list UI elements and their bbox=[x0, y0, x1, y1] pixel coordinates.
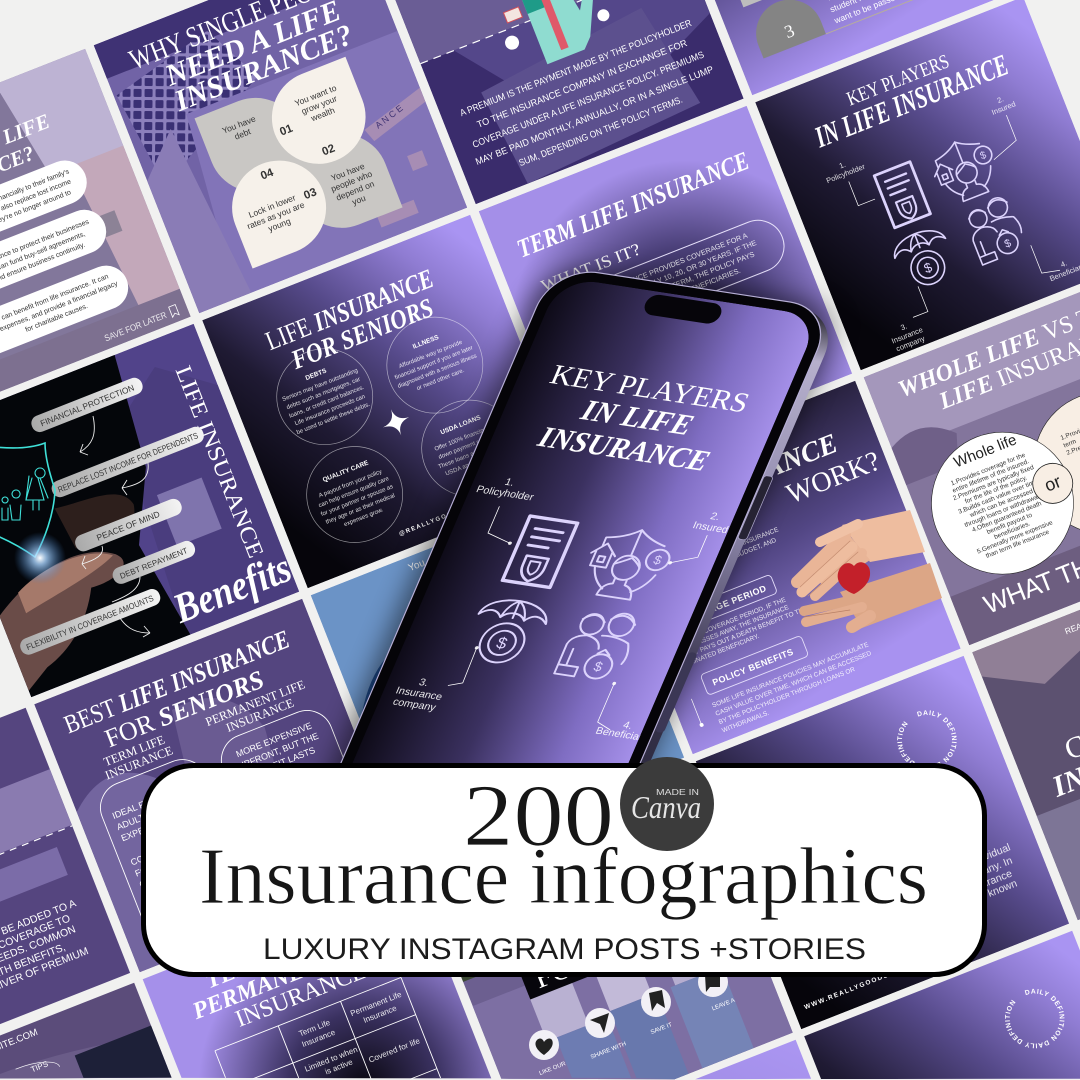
intro text bbox=[707, 526, 784, 569]
title: BEST LIFE INSURANCE bbox=[60, 624, 294, 739]
screen title: IN LIFE bbox=[575, 393, 699, 442]
outlined pill: SPECIFIC PERIOD, USUALLY 10, 20, OR 30 YEARS. IF THE bbox=[567, 238, 758, 320]
petal diagram: debt bbox=[233, 126, 253, 142]
circle: quality care: for your partner or spouse as bbox=[320, 484, 394, 518]
handle: @REALLYGOODSITE bbox=[398, 502, 477, 538]
phone screen bbox=[309, 277, 829, 906]
title bbox=[264, 269, 433, 370]
title bbox=[179, 901, 404, 1047]
circle: whole life: 5.Generally more expensive bbox=[976, 519, 1054, 556]
circle: debts: DEBTS bbox=[305, 367, 328, 382]
icon: beneficiaries bbox=[554, 607, 644, 683]
definition text: insurance bbox=[967, 868, 1014, 895]
main heading: Insurance infographics bbox=[199, 833, 928, 921]
definition text: MAY BE PAID MONTHLY, ANNUALLY, OR IN A SINGLE LUMP bbox=[474, 64, 715, 168]
made in canva badge bbox=[620, 757, 714, 851]
panel: riders card bbox=[0, 708, 130, 1078]
step number arch bbox=[756, 0, 826, 58]
benefit pill three bbox=[0, 266, 128, 354]
circle: illness: diagnosed with a serious illness bbox=[397, 353, 478, 390]
definition text bbox=[953, 841, 1025, 908]
circle: whole life: than term life insurance bbox=[985, 528, 1051, 560]
circular daily definition badge: DAILY DEFINITION DAILY DEFINITION bbox=[1005, 988, 1064, 1048]
intro text: NEEDS, BUDGET, AND bbox=[710, 537, 778, 569]
panel: key players in life insurance bbox=[755, 0, 1080, 370]
number 200: 200 bbox=[463, 768, 614, 865]
benefits text: BY THE POLICYHOLDER THROUGH LOANS OR bbox=[718, 666, 856, 726]
circle: quality care: A payout from your policy bbox=[318, 469, 383, 499]
label: policyholder bbox=[822, 153, 878, 213]
option: term life: FOR A SET bbox=[134, 852, 181, 879]
panel: definition card bbox=[696, 656, 1069, 1030]
panel: what is life insurance photo card bbox=[0, 49, 191, 422]
option: term life: TERM LIFE bbox=[102, 732, 167, 769]
panel: definition card bottom bbox=[804, 930, 1080, 1079]
title bbox=[803, 31, 1013, 154]
option: term life: COVERAGE bbox=[129, 839, 180, 867]
panel: permanent life table bbox=[143, 874, 491, 1080]
petal diagram: 02 bbox=[320, 143, 337, 158]
petal diagram: You have bbox=[330, 161, 366, 183]
label: insurance company: company bbox=[895, 334, 926, 353]
circle: usda loans: These loans are backed by bbox=[438, 439, 507, 471]
circle: quality care: QUALITY CARE bbox=[322, 459, 370, 484]
label: policyholder: 1. bbox=[503, 476, 516, 489]
circle: whole life: Whole life bbox=[952, 431, 1019, 471]
coverage text bbox=[641, 590, 812, 682]
circle: usda loans: USDA LOANS bbox=[440, 414, 482, 436]
made in canva badge: Canva bbox=[631, 789, 701, 825]
circle: illness: Affordable way to provide bbox=[398, 339, 464, 370]
icon: policy document bbox=[874, 162, 930, 228]
petal diagram: 03 bbox=[302, 186, 319, 202]
title: HOW DOES INSURANCE bbox=[535, 428, 842, 573]
phone mockup bbox=[294, 266, 845, 917]
heading vertical: LIFE INSURANCE bbox=[171, 362, 269, 561]
title: TERM LIFE VS bbox=[202, 909, 365, 994]
label: policyholder: Policyholder bbox=[825, 162, 867, 185]
panel: blue card behind phone bbox=[311, 490, 684, 863]
label: insured: 2. bbox=[996, 94, 1005, 105]
circle: debts: debts such as mortgages, car bbox=[286, 377, 361, 411]
label: insured: Insured bbox=[691, 520, 730, 536]
circle: whole life: 4.Often guaranteed death bbox=[971, 500, 1043, 534]
title: KEY PLAYERS bbox=[844, 50, 952, 110]
comparison table: Term Life bbox=[298, 1018, 332, 1038]
petal diagram: rates as you are bbox=[246, 199, 306, 231]
made in canva badge: MADE IN bbox=[656, 788, 699, 797]
or badge bbox=[1027, 457, 1079, 509]
coverage text: DURING THE COVERAGE PERIOD, IF THE bbox=[664, 596, 788, 651]
circle: term life bbox=[1013, 371, 1080, 555]
comparison table: is active bbox=[324, 1057, 355, 1076]
dashed line bbox=[420, 0, 582, 64]
circle: whole life: entire lifetime of the insured. bbox=[952, 458, 1030, 495]
circle: illness: ILLNESS bbox=[412, 334, 441, 351]
panel: why single people need life insurance bbox=[94, 0, 467, 313]
comparison table: Insurance bbox=[301, 1028, 337, 1049]
title bbox=[1036, 679, 1080, 804]
benefit pill three: for charitable causes. bbox=[24, 303, 89, 334]
circle: usda loans: down payment required. bbox=[438, 432, 500, 461]
label: insurance company: Insurance bbox=[890, 325, 924, 345]
definition text: SUM, DEPENDING ON THE POLICY TERMS. bbox=[517, 95, 684, 169]
circle: quality care bbox=[306, 446, 403, 543]
panel: whole life vs term life bbox=[864, 272, 1080, 645]
action: save bbox=[641, 987, 674, 1036]
icon: neon family shield bbox=[0, 443, 55, 557]
title banner bbox=[144, 766, 984, 974]
outlined pill: TERM LIFE INSURANCE PROVIDES COVERAGE FOR A bbox=[569, 231, 749, 309]
circle: illness bbox=[386, 316, 484, 414]
icon: teal character bbox=[502, 0, 610, 64]
riders text bbox=[0, 897, 96, 1023]
label: policyholder bbox=[456, 473, 541, 546]
coverage text: COMPANY PAYS OUT A DEATH BENEFIT TO THE bbox=[667, 605, 809, 666]
icon: policy document bbox=[503, 516, 578, 588]
action: like bbox=[529, 1030, 567, 1077]
circle: usda loans bbox=[421, 400, 494, 494]
panel: best life insurance for seniors bbox=[34, 599, 408, 972]
circular daily definition badge: DAILY DEFINITION DAILY DEFINITION bbox=[897, 710, 957, 764]
action: share: SHARE WITH bbox=[590, 1041, 627, 1061]
circle: debts bbox=[276, 348, 374, 445]
circle: whole life: which can be accessed bbox=[968, 488, 1034, 519]
circle: quality care: they age or as their medical bbox=[325, 493, 396, 526]
outlined pill: INSURED DIES DURING THE TERM, THE POLICY PAYS bbox=[576, 250, 756, 327]
title bbox=[127, 0, 349, 112]
box: policy benefits: POLICY BENEFITS bbox=[711, 647, 795, 688]
option: permanent life: MORE EXPENSIVE bbox=[235, 720, 313, 759]
tips oval bbox=[16, 1054, 60, 1080]
action: save: SAVE IT bbox=[650, 1022, 674, 1036]
label: insurance company: 3. bbox=[417, 677, 430, 689]
circle: illness: financial support if you are later bbox=[394, 345, 474, 381]
benefits text: WITHDRAWALS. bbox=[721, 710, 770, 735]
benefits text bbox=[711, 641, 880, 735]
icon: insured person bbox=[926, 131, 1004, 208]
panel: term life insurance bbox=[478, 106, 852, 390]
intro text: YOUR INSURANCE bbox=[722, 526, 780, 555]
step text bbox=[829, 0, 894, 24]
title: PERMANENT LIFE bbox=[188, 923, 395, 1025]
label: beneficiary bbox=[1031, 230, 1080, 285]
dynamic island bbox=[641, 293, 725, 325]
label: beneficiary: 4. bbox=[1059, 259, 1068, 269]
action: share bbox=[585, 1008, 627, 1061]
label: insurance company: 3. bbox=[899, 322, 908, 332]
or badge: or bbox=[1042, 471, 1064, 496]
panel: benefits bbox=[0, 324, 299, 697]
circle: whole life: beneficiaries. bbox=[993, 520, 1032, 541]
circle: debts: Life insurance proceeds can bbox=[294, 394, 366, 427]
phone side band bbox=[303, 271, 842, 917]
petal diagram: depend on bbox=[335, 178, 376, 203]
heading script: Benefits bbox=[167, 545, 298, 633]
option: permanent life: BENEFIT LASTS bbox=[249, 745, 317, 779]
connector dot bbox=[689, 698, 704, 728]
label: policyholder: 1. bbox=[838, 160, 847, 171]
label: beneficiary: 4. bbox=[621, 720, 634, 732]
panel: lavender card bottom bbox=[695, 1040, 811, 1080]
petal diagram: 01 bbox=[278, 122, 295, 139]
subheading: WHAT IS IT? bbox=[538, 240, 643, 296]
petal diagram: wealth bbox=[309, 105, 336, 124]
icon: umbrella coin bbox=[889, 224, 959, 293]
definition text: an individual bbox=[953, 841, 1012, 874]
petal diagram: You want to bbox=[293, 83, 338, 108]
hands holding a heart bbox=[797, 510, 942, 628]
screen title: INSURANCE bbox=[532, 420, 715, 477]
icon: insured person bbox=[575, 524, 680, 603]
label: beneficiary: Beneficiary bbox=[594, 725, 651, 744]
circle: term life: term bbox=[1063, 438, 1077, 449]
black banner: FOLLOW US bbox=[529, 902, 700, 995]
option: term life: INSURANCE bbox=[103, 743, 175, 783]
title: TERM LIFE INSURANCE bbox=[513, 146, 753, 263]
benefit pill one bbox=[0, 160, 87, 232]
black banner bbox=[506, 869, 707, 1000]
label: insurance company: Insurance bbox=[394, 685, 444, 703]
action: comment: LEAVE A bbox=[711, 998, 736, 1012]
panel: engagement photo card bbox=[419, 765, 793, 1080]
title: FOR SENIORS bbox=[286, 292, 437, 375]
circle: quality care: can help ensure quality care bbox=[318, 476, 391, 509]
comparison table: Permanent Life bbox=[349, 990, 403, 1018]
circle: whole life: through loans or withdrawals. bbox=[964, 491, 1045, 529]
option: permanent life: PERMANENT LIFE bbox=[203, 677, 307, 729]
panel: website tips photo card bbox=[0, 983, 172, 1080]
comparison table: Insurance bbox=[362, 1003, 399, 1025]
definition text: A PREMIUM IS THE PAYMENT MADE BY THE POLICYHOLDER bbox=[459, 18, 693, 119]
panel: premium definition bbox=[370, 0, 744, 204]
greeting: You bbox=[407, 558, 427, 574]
title bbox=[535, 416, 885, 603]
definition text: TO THE INSURANCE COMPANY IN EXCHANGE FOR bbox=[476, 38, 689, 131]
petal diagram: you bbox=[351, 193, 367, 207]
title: FOR SENIORS bbox=[101, 665, 268, 753]
side button upper bbox=[737, 475, 773, 540]
definition text: COVERAGE UNDER A LIFE INSURANCE POLICY. PREMIUMS bbox=[471, 50, 706, 151]
benefits text: SOME LIFE INSURANCE POLICIES MAY ACCUMULATE bbox=[711, 641, 870, 709]
dashed line bbox=[0, 826, 72, 931]
circle: debts: be used to settle these debts. bbox=[296, 402, 371, 436]
icon: sparkle bbox=[383, 410, 409, 436]
icon: umbrella coin bbox=[460, 596, 554, 667]
pill: peace of mind bbox=[75, 498, 182, 552]
outlined pill: A DEATH BENEFIT TO THE BENEFICIARIES. bbox=[598, 266, 742, 330]
coverage text: POLICYHOLDER PASSES AWAY, THE INSURANCE bbox=[644, 604, 790, 667]
circle: whole life: 1.Provides coverage for the bbox=[950, 452, 1027, 487]
pill: financial protection: FINANCIAL PROTECTION bbox=[39, 382, 136, 428]
screen title: KEY PLAYERS bbox=[546, 360, 754, 419]
subheading: LUXURY INSTAGRAM POSTS +STORIES bbox=[263, 933, 866, 966]
save for later note: SAVE FOR LATER bbox=[103, 310, 168, 343]
wheel arc bbox=[339, 625, 476, 740]
option: term life bbox=[81, 723, 263, 960]
comparison table: Covered for life bbox=[367, 1036, 422, 1065]
website: WWW.REALLYGOODSITE.COM bbox=[803, 958, 924, 1011]
title: LIFE INSURANCE bbox=[261, 263, 438, 356]
petal diagram: Lock in lower bbox=[247, 192, 297, 220]
label: insured: Insured bbox=[990, 99, 1017, 117]
letter tiles: A N C E bbox=[373, 103, 405, 130]
outlined pill bbox=[614, 220, 785, 290]
petal diagram bbox=[193, 57, 405, 269]
label: insurance company bbox=[877, 286, 938, 354]
panel: how does insurance work bbox=[522, 381, 961, 780]
pill: debt repayment: DEBT REPAYMENT bbox=[119, 546, 189, 581]
comparison table: Limited to when bbox=[303, 1045, 359, 1074]
pill: replace lost income: REPLACE LOST INCOME FOR DEPENDENTS bbox=[56, 430, 200, 495]
glow of light bbox=[14, 532, 66, 584]
petal diagram: young bbox=[267, 216, 292, 234]
petal diagram: 04 bbox=[259, 167, 276, 183]
phone drop shadow bbox=[288, 262, 845, 914]
circle: debts: Seniors may have outstanding bbox=[282, 368, 359, 403]
petal diagram: You have bbox=[221, 113, 257, 136]
title: WORK? bbox=[782, 446, 885, 510]
circle: usda loans: USDA and help seniors. bbox=[445, 448, 507, 477]
arrows between benefits bbox=[80, 416, 150, 637]
circle: whole life: 3.Builds cash value over time, bbox=[957, 478, 1041, 516]
option: term life: IDEAL FOR YOUNG bbox=[111, 781, 191, 821]
petal diagram: grow your bbox=[300, 93, 339, 116]
action: comment bbox=[698, 967, 736, 1012]
people sitting bbox=[525, 916, 754, 1080]
tips oval: TIPS bbox=[30, 1059, 49, 1074]
circle: whole life: for the life of the policy. bbox=[964, 474, 1029, 505]
coverage text: NOMINATED BENEFICIARY. bbox=[679, 633, 761, 670]
label: insurance company: company bbox=[391, 696, 438, 714]
petal diagram: people who bbox=[329, 169, 374, 194]
label: beneficiary bbox=[590, 682, 669, 744]
panel: numbered steps card bbox=[714, 0, 994, 95]
screen title bbox=[519, 360, 754, 480]
pill: debt repayment bbox=[112, 540, 196, 584]
hands bbox=[0, 552, 124, 690]
benefits text: CASH VALUE OVER TIME, WHICH CAN BE ACCESSED bbox=[715, 650, 873, 718]
definition text: is known bbox=[976, 877, 1019, 904]
circle: quality care: expenses grow. bbox=[343, 507, 385, 528]
pill: peace of mind: PEACE OF MIND bbox=[95, 509, 161, 543]
option: permanent life: UPFRONT, BUT THE bbox=[237, 731, 320, 771]
circle: whole life: 2.Premiums are typically fixed bbox=[952, 464, 1035, 502]
option: permanent life: INSURANCE bbox=[224, 696, 296, 735]
circle: whole life bbox=[910, 411, 1080, 595]
title: INSURANCE bbox=[232, 958, 369, 1033]
option: permanent life bbox=[202, 674, 388, 913]
circle: whole life: benefit payout to bbox=[986, 512, 1034, 536]
circle: illness: or need other care. bbox=[416, 368, 466, 392]
title: INSURANCE? bbox=[169, 18, 358, 118]
box: coverage period bbox=[666, 574, 778, 634]
circle: debts: loans, or credit card balances. bbox=[289, 385, 366, 420]
pill: flexibility: FLEXIBILITY IN COVERAGE AMOUNTS bbox=[25, 593, 155, 652]
phone body bbox=[294, 266, 835, 915]
title bbox=[60, 624, 304, 765]
action: like: LIKE OUR bbox=[539, 1061, 567, 1077]
panel: life insurance for seniors bbox=[202, 215, 520, 588]
label: policyholder: Policyholder bbox=[474, 484, 536, 503]
step number arch: 3 bbox=[781, 20, 797, 42]
comparison table bbox=[215, 977, 441, 1080]
side button lower bbox=[655, 652, 698, 733]
box: policy benefits bbox=[700, 635, 809, 695]
option: term life: EXPENSES bbox=[120, 816, 168, 843]
icon: beneficiaries bbox=[962, 193, 1029, 265]
label: insured bbox=[668, 507, 735, 571]
label: insurance company bbox=[389, 637, 479, 716]
circle: usda loans: Offer 100% financing, no bbox=[434, 423, 498, 453]
panel: choosing insurance photo card bbox=[972, 547, 1080, 920]
label: insured bbox=[973, 91, 1032, 160]
label: insured: 2. bbox=[708, 511, 722, 523]
definition text bbox=[461, 20, 712, 166]
definition text: company. In bbox=[957, 855, 1014, 886]
letter tiles bbox=[364, 88, 428, 228]
option: term life: ADULTS WITH bbox=[115, 801, 175, 832]
option: term life: COST bbox=[138, 871, 165, 890]
box: coverage period: COVERAGE PERIOD bbox=[676, 583, 768, 627]
